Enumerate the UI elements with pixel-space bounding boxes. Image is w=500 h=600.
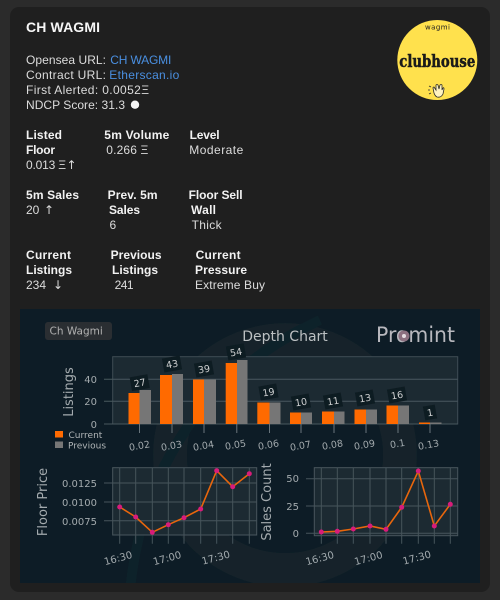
x axis labels: 0.13 [417, 438, 440, 453]
axis labels: 17:00 [152, 550, 183, 568]
icon: clubhouse logo [397, 20, 477, 100]
text block: collection links and score: First Alerted: 0.0052Ξ [26, 83, 149, 97]
bar value labels: 1 [426, 408, 434, 419]
axis labels: 17:30 [402, 550, 432, 568]
line chart: sales count [260, 463, 458, 568]
bar chart: depth chart [55, 344, 458, 454]
bar value labels: 19 [262, 387, 276, 399]
stat: listed floor: 0.013 Ξ [26, 158, 66, 172]
y axis labels: 40 [84, 375, 97, 386]
x axis labels: 0.04 [192, 439, 215, 454]
logo: Promint: Promint [376, 323, 455, 347]
axis labels: 0.0125 [62, 479, 97, 490]
axis labels: 25 [286, 502, 299, 513]
stat: current pressure: Current [196, 248, 241, 262]
legend: Previous [68, 442, 106, 452]
axis labels: 16:30 [103, 550, 134, 568]
title: CH WAGMI [26, 19, 100, 35]
axis labels: 0.0075 [62, 517, 97, 528]
x axis labels: 0.08 [321, 438, 344, 453]
bar value labels: 16 [390, 390, 404, 402]
bar value labels: 27 [133, 377, 147, 390]
stat: floor sell wall: Thick [192, 218, 223, 232]
icon: clubhouse logo: wagmi [425, 24, 450, 32]
x axis labels: 0.02 [128, 439, 151, 454]
stat: current listings [26, 248, 72, 292]
chart title: Depth Chart [242, 329, 328, 345]
stat: previous 5m sales: Sales [109, 203, 140, 217]
data points [319, 468, 453, 534]
bar value labels: 10 [294, 397, 308, 409]
x axis labels: 0.1 [389, 438, 406, 451]
data points [117, 468, 252, 535]
text block: collection links and score: CH WAGMI [110, 53, 171, 67]
axis labels: 16:30 [305, 550, 335, 568]
stat: 5m volume: 0.266 Ξ [106, 143, 148, 157]
x axis labels: 0.03 [160, 439, 183, 454]
x axis labels: 0.05 [224, 438, 247, 453]
stat: 5m volume: 5m Volume [104, 128, 170, 142]
stat: 5m volume [104, 128, 170, 157]
axis labels [260, 463, 432, 568]
stat: current listings: 234 [26, 278, 46, 292]
stat: previous 5m sales [108, 188, 158, 232]
data line [120, 471, 249, 532]
stat: level [189, 128, 244, 157]
stat: listed floor [26, 128, 77, 172]
stat: floor sell wall [189, 188, 243, 232]
axis labels: 0.0100 [62, 498, 97, 509]
stat: 5m sales: 5m Sales [26, 188, 79, 202]
legend [55, 431, 106, 452]
text block: collection links and score: Opensea URL: [26, 53, 106, 67]
y axis labels: 0 [91, 420, 97, 431]
stat: previous listings: 241 [115, 278, 134, 292]
stat: 5m sales: 20 [26, 203, 40, 217]
stat: previous listings: Previous [111, 248, 162, 262]
legend: Current [68, 431, 103, 441]
line chart: floor price [36, 468, 257, 568]
stat: current pressure: Extreme Buy [195, 278, 265, 292]
axis labels: Floor Price [36, 468, 51, 536]
y axis labels: 20 [84, 397, 97, 408]
bar value labels: 11 [326, 396, 340, 408]
text block: collection links and score [26, 53, 180, 112]
stat: current pressure [195, 248, 265, 292]
stat: previous listings [111, 248, 162, 292]
bars: current listings [128, 363, 430, 424]
stat: previous 5m sales: 6 [110, 218, 116, 232]
stat: current pressure: Pressure [195, 263, 247, 277]
y axis labels [62, 367, 97, 431]
data line [321, 471, 450, 532]
stat: level: Moderate [189, 143, 244, 157]
x axis labels: 0.07 [289, 439, 312, 454]
stat: current listings: ↓ [53, 278, 63, 292]
stat: current listings: Current [26, 248, 71, 262]
axis labels [36, 468, 231, 568]
y axis labels: Listings [62, 367, 77, 417]
text block: collection links and score: NDCP Score: 31.3 [26, 98, 125, 112]
text block: collection links and score: Etherscan.io [109, 68, 180, 82]
stat: level: Level [190, 128, 220, 142]
x axis labels: 0.06 [257, 438, 280, 453]
stat: floor sell wall: Floor Sell [189, 188, 243, 202]
stat: current listings: Listings [26, 263, 72, 277]
axis labels: 17:00 [353, 550, 384, 568]
stat: 5m sales: ↑ [44, 203, 54, 217]
bar value labels: 39 [197, 364, 211, 376]
panel: chart image [20, 309, 480, 590]
stat: floor sell wall: Wall [191, 203, 216, 217]
x axis labels [128, 438, 440, 454]
axis labels: Sales Count [260, 463, 275, 541]
badge: collection name: Ch Wagmi [50, 326, 103, 338]
x axis labels: 0.09 [353, 438, 376, 453]
bar value labels: 13 [358, 393, 372, 405]
stat: listed floor: Floor [26, 143, 55, 157]
axis labels: 17:30 [201, 550, 231, 568]
stat: 5m sales [26, 188, 79, 217]
badge: collection name [45, 322, 112, 340]
bar value labels [130, 344, 437, 420]
bar value labels: 43 [165, 359, 179, 371]
stat: listed floor: Listed [26, 128, 62, 142]
icon: clubhouse logo: clubhouse [399, 52, 475, 72]
stat: previous 5m sales: Prev. 5m [108, 188, 158, 202]
stat: listed floor: ↑ [66, 158, 77, 172]
stat: previous listings: Listings [112, 263, 158, 277]
axis labels: 50 [286, 474, 299, 485]
bar value labels: 54 [229, 347, 243, 359]
bars: previous listings [140, 360, 442, 424]
axis labels: 0 [293, 529, 299, 540]
text block: collection links and score: Contract URL: [26, 68, 106, 82]
